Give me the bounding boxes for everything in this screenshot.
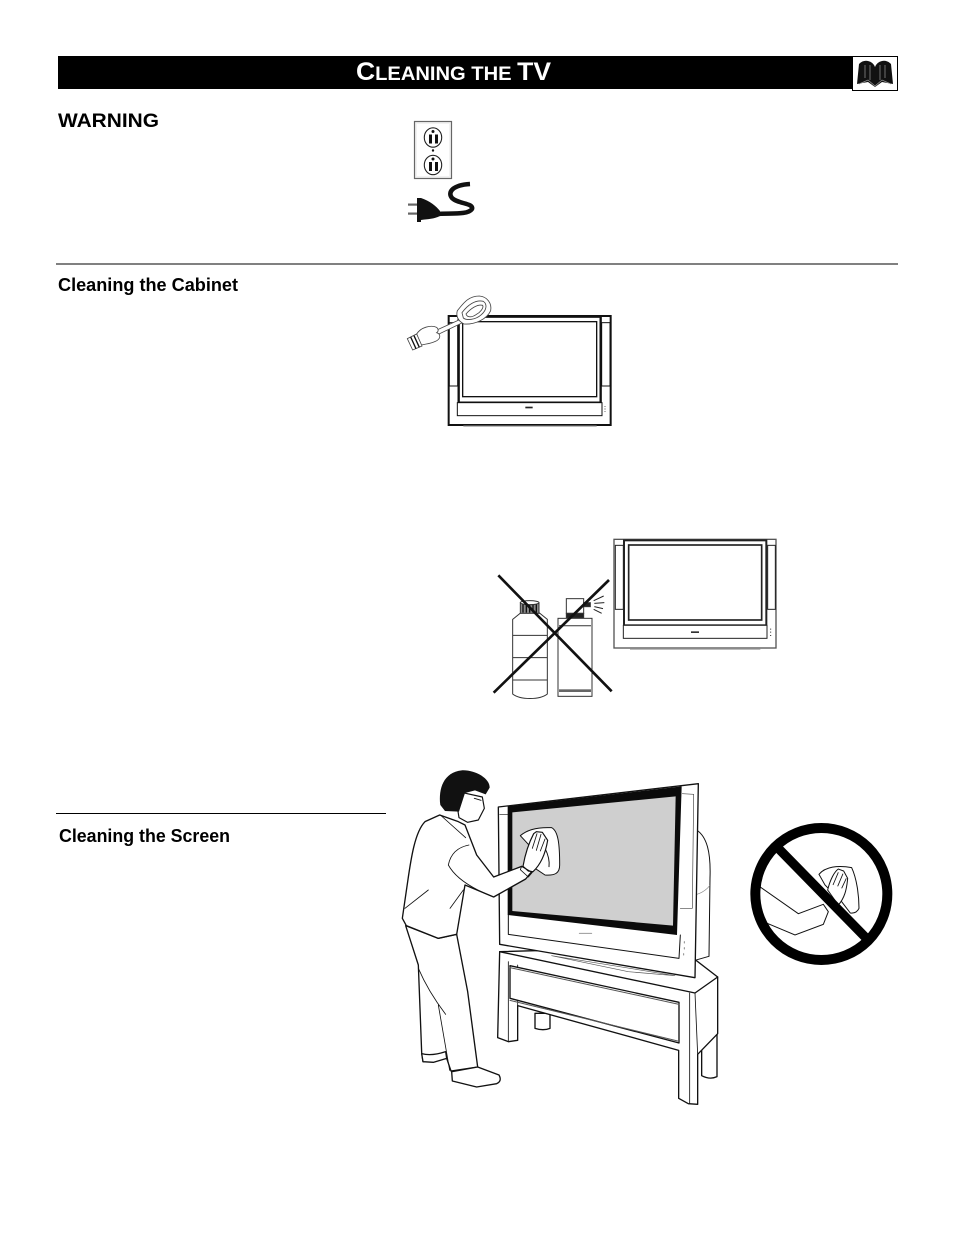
tv cabinet [614,539,776,648]
illustration: man wiping tv screen on stand [402,770,718,1104]
title banner: CLEANING THE TV [356,58,551,86]
illustration: tv with dusting cloth [407,296,611,426]
tv rear housing [695,830,710,960]
illustration: no spray cleaners near tv [494,539,776,698]
illustration: do not wipe prohibition sign [755,827,888,961]
spray can [558,596,604,696]
heading: cleaning the screen: Cleaning the Screen [59,826,230,846]
screen with black bezel [508,786,682,935]
man: torso and arm [402,815,532,938]
man: hand [523,832,548,872]
divider [56,812,386,814]
stand [498,947,718,1104]
man: head [457,792,484,822]
icon: power plug and cord [408,184,472,222]
tv cabinet [449,316,611,425]
icon: open book [852,56,898,90]
cross out [494,575,612,693]
icon: wall outlet [414,122,452,178]
tv front frame [498,784,698,978]
arm [758,886,828,935]
man: shoes [422,1052,447,1062]
heading: cleaning the cabinet: Cleaning the Cabinet [58,275,238,295]
duster in hand [407,296,491,350]
bottle [513,601,547,698]
prohibition ring and bar [755,828,887,960]
man: trousers [406,926,478,1071]
title banner [58,56,852,89]
cloth [520,828,560,875]
cloth and hand [819,866,859,913]
heading: warning: WARNING [58,111,159,132]
divider [56,263,898,265]
